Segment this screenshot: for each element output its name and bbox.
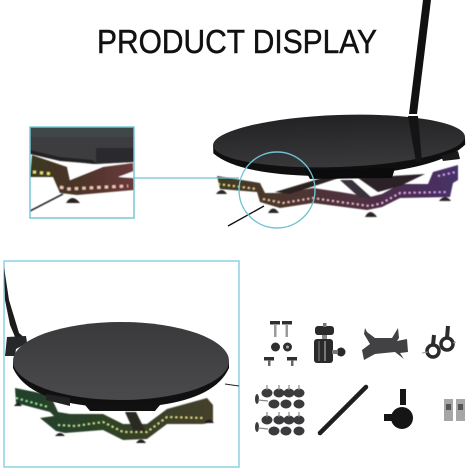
icon: pole [320, 387, 366, 433]
side handle [46, 394, 70, 406]
icon: ball head mount [314, 323, 346, 363]
magnifier circle and connector line [134, 152, 315, 228]
feet [216, 190, 451, 217]
icon: leveling feet set [255, 385, 304, 436]
inset: zoomed detail of turntable base [30, 127, 134, 218]
icon: screws and knobs [264, 321, 297, 366]
turntable: top view with pole and LED base [212, 0, 466, 226]
disc [212, 111, 466, 180]
icon: pole base connector [384, 389, 413, 429]
LED star base [216, 165, 458, 217]
pole clamp [5, 336, 27, 356]
panel: turntable rear view [4, 261, 239, 467]
vertical pole [409, 0, 431, 114]
title: PRODUCT DISPLAY [97, 23, 377, 60]
icon: tablet holder [362, 328, 408, 360]
disc [13, 362, 229, 408]
power cable [225, 384, 239, 386]
side clamp [441, 151, 460, 161]
icon: pipe clamps [422, 326, 456, 357]
LED star base [14, 388, 214, 443]
pole [4, 267, 27, 344]
icon: metal brackets [444, 399, 465, 421]
feet [14, 403, 214, 443]
accessories [255, 321, 465, 436]
power cable [228, 206, 264, 226]
